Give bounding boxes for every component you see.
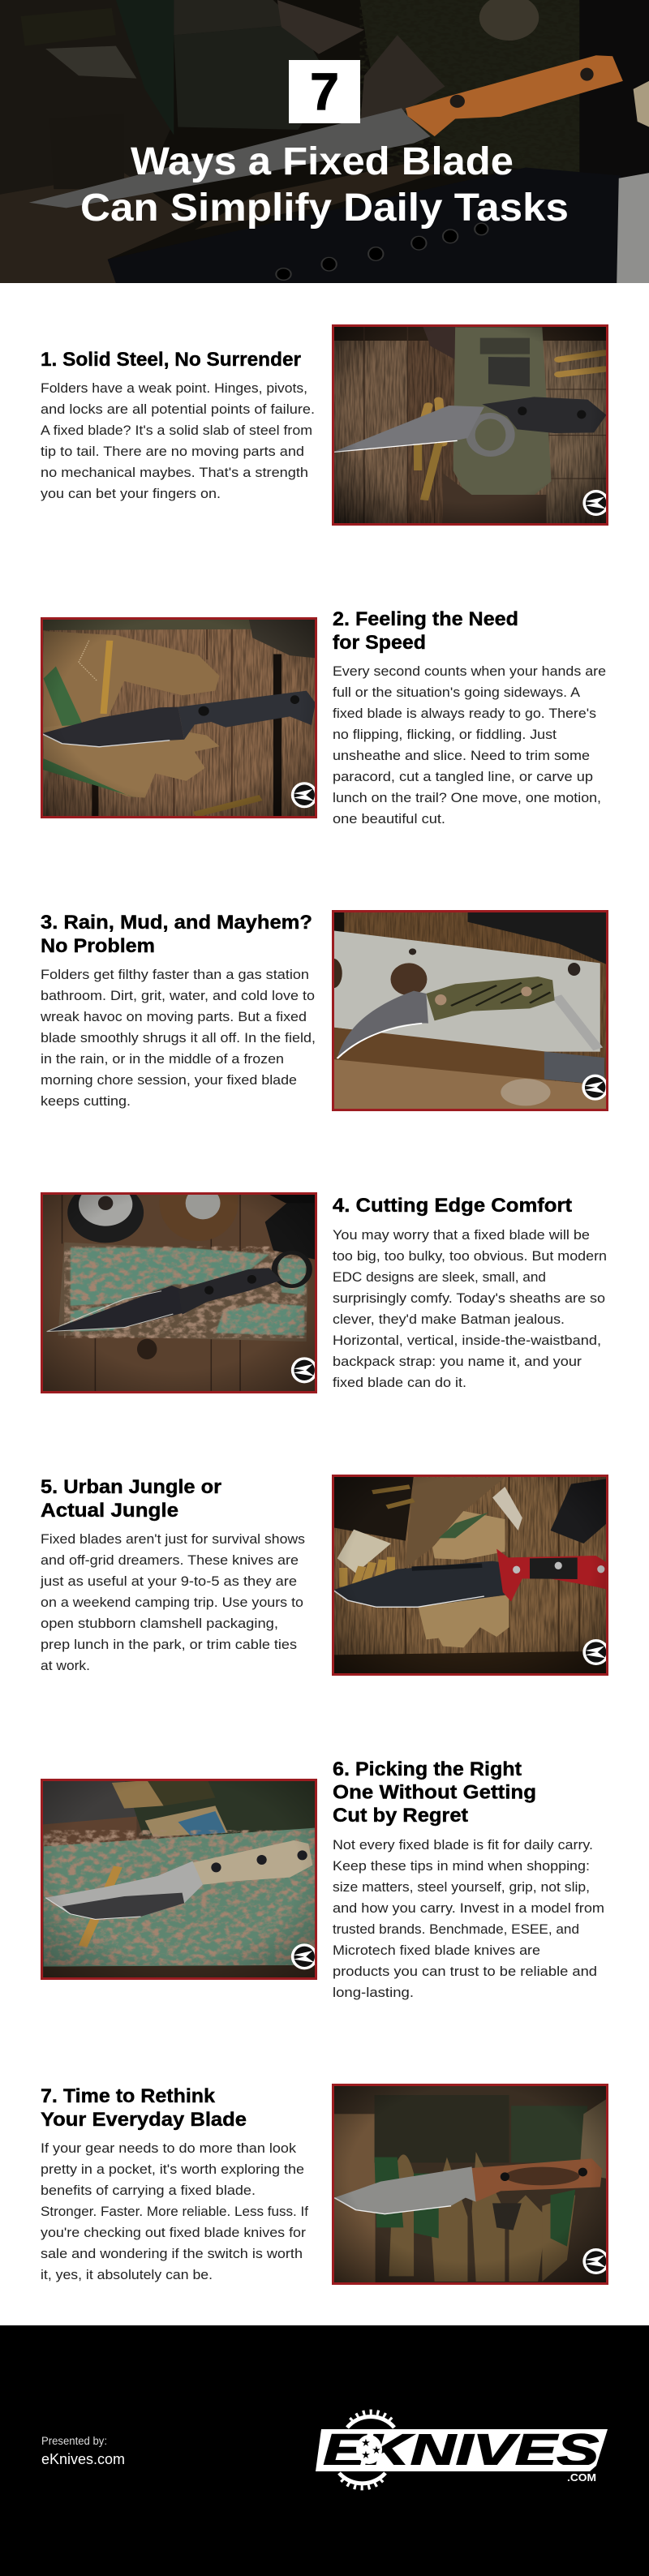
- section 5: urban jungle: [40, 1475, 609, 1676]
- heading 4: 4. Cutting Edge Comfort: [333, 1195, 572, 1217]
- body text 3: in the rain, or in the middle of a frozen: [41, 1052, 284, 1067]
- photo 4: knife on rusty box: [41, 1166, 318, 1393]
- heading 3: 3. Rain, Mud, and Mayhem?: [41, 912, 312, 934]
- body text 5: and off-grid dreamers. These knives are: [41, 1553, 299, 1568]
- body text 1: you can bet your fingers on.: [41, 487, 221, 501]
- body text 5: prep lunch in the park, or trim cable ties: [41, 1638, 297, 1652]
- heading 3: No Problem: [41, 935, 155, 957]
- body text 1: no mechanical maybes. That's a strength: [41, 466, 308, 480]
- logo stars: [356, 2435, 382, 2464]
- eKnives logo: EKNIVES: [323, 2424, 599, 2475]
- heading 6: [333, 1758, 536, 1827]
- body text 6: [333, 1838, 604, 2000]
- heading 6: One Without Getting: [333, 1781, 536, 1804]
- heading 2: for Speed: [333, 632, 426, 654]
- body text 4: clever, they'd make Batman jealous.: [333, 1312, 565, 1327]
- header banner: [0, 0, 649, 283]
- title: Ways a Fixed Blade: [131, 140, 514, 183]
- body text 7: sale and wondering if the switch is worth: [41, 2247, 303, 2261]
- body text 3: blade smoothly shrugs it all off. In the field,: [41, 1031, 316, 1045]
- body text 6: size matters, steel yourself, grip, not slip,: [333, 1880, 590, 1895]
- body text 4: too big, too bulky, too obvious. But modern: [333, 1249, 607, 1264]
- heading 7: Your Everyday Blade: [41, 2109, 247, 2131]
- photo 3: karambit on steel plate: [324, 910, 608, 1111]
- section 3: rain, mud, mayhem: [40, 910, 608, 1111]
- body text 3: morning chore session, your fixed blade: [41, 1073, 297, 1088]
- body text 7: Stronger. Faster. More reliable. Less fuss. If: [41, 2205, 308, 2219]
- section 1: solid steel: [41, 324, 609, 526]
- body text 4: fixed blade can do it.: [333, 1376, 466, 1390]
- section 4: cutting edge comfort: [41, 1166, 607, 1393]
- logo stars: ★: [361, 2436, 371, 2449]
- presenter credit: [41, 2435, 125, 2467]
- body text 6: products you can trust to be reliable and: [333, 1964, 597, 1979]
- body text 6: and how you carry. Invest in a model from: [333, 1901, 604, 1916]
- body text 5: open stubborn clamshell packaging,: [41, 1616, 278, 1631]
- heading 1: 1. Solid Steel, No Surrender: [41, 349, 301, 371]
- watermark badge 7: [582, 2248, 609, 2274]
- body text 6: Not every fixed blade is fit for daily carry.: [333, 1838, 593, 1853]
- body text 4: EDC designs are sleek, small, and: [333, 1270, 546, 1285]
- logo stars: ★: [361, 2449, 371, 2461]
- presenter credit: eKnives.com: [41, 2451, 125, 2467]
- photo 7: wood handled knife: [332, 2084, 609, 2285]
- body text 7: you're checking out fixed blade knives for: [41, 2226, 307, 2240]
- watermark badge 6: [291, 1943, 318, 1969]
- heading 7: [41, 2085, 247, 2131]
- body text 3: Folders get filthy faster than a gas station: [41, 968, 309, 982]
- body text 6: Keep these tips in mind when shopping:: [333, 1859, 590, 1874]
- body text 1: and locks are all potential points of failure.: [41, 402, 315, 417]
- number badge: [289, 60, 360, 123]
- body text 2: no flipping, flicking, or fiddling. Just: [333, 728, 557, 742]
- number badge: 7: [310, 62, 339, 121]
- body text 2: paracord, cut a tangled line, or carve up: [333, 770, 593, 784]
- body text 1: tip to tail. There are no moving parts and: [41, 444, 304, 459]
- body text 2: one beautiful cut.: [333, 812, 445, 826]
- heading 6: Cut by Regret: [333, 1805, 468, 1827]
- heading 7: 7. Time to Rethink: [41, 2085, 216, 2107]
- title: Can Simplify Daily Tasks: [80, 187, 569, 230]
- body text 6: Microtech fixed blade knives are: [333, 1943, 540, 1958]
- heading 3: [41, 912, 312, 957]
- heading 5: [41, 1476, 221, 1522]
- logo .com: .COM: [567, 2472, 596, 2484]
- photo 1: knife on magazine: [332, 324, 609, 526]
- logo gear arcs: [339, 2413, 394, 2487]
- body text 3: bathroom. Dirt, grit, water, and cold love to: [41, 989, 315, 1003]
- heading 5: 5. Urban Jungle or: [41, 1476, 221, 1498]
- body text 4: [333, 1228, 607, 1390]
- heading 6: 6. Picking the Right: [333, 1758, 522, 1780]
- body text 7: [41, 2141, 308, 2282]
- section 2: need for speed: [41, 608, 606, 826]
- body text 2: [333, 664, 606, 826]
- body text 3: wreak havoc on moving parts. But a fixed: [40, 1010, 307, 1024]
- title: [80, 140, 569, 230]
- heading 2: [333, 608, 518, 654]
- heading 2: 2. Feeling the Need: [333, 608, 518, 630]
- body text 3: keeps cutting.: [41, 1094, 131, 1109]
- body text 2: unsheathe and slice. Need to trim some: [333, 749, 590, 763]
- body text 4: Horizontal, vertical, inside-the-waistband,: [333, 1333, 601, 1348]
- body text 5: at work.: [41, 1659, 90, 1673]
- body text 7: If your gear needs to do more than look: [41, 2141, 297, 2156]
- presenter credit: Presented by:: [41, 2435, 107, 2447]
- body text 1: Folders have a weak point. Hinges, pivots,: [41, 381, 307, 396]
- footer: [0, 2325, 649, 2576]
- body text 6: trusted brands. Benchmade, ESEE, and: [333, 1922, 579, 1937]
- watermark badge 4: [291, 1357, 318, 1383]
- photo 6: tan handled knife: [41, 1779, 319, 1980]
- body text 2: Every second counts when your hands are: [333, 664, 606, 679]
- body text 3: [40, 968, 316, 1109]
- watermark badge 2: [291, 782, 318, 808]
- section 6: picking the right one: [41, 1758, 604, 2000]
- body text 7: pretty in a pocket, it's worth exploring the: [41, 2162, 304, 2177]
- body text 4: You may worry that a fixed blade will be: [333, 1228, 590, 1243]
- body text 7: it, yes, it absolutely can be.: [41, 2268, 213, 2282]
- watermark badge 3: [582, 1075, 608, 1101]
- body text 1: [41, 381, 315, 501]
- header background photo: [0, 0, 649, 283]
- body text 2: fixed blade is always ready to go. There's: [333, 706, 596, 721]
- body text 2: lunch on the trail? One move, one motion,: [333, 791, 601, 805]
- logo stars: ★: [372, 2444, 381, 2456]
- body text 5: Fixed blades aren't just for survival shows: [41, 1532, 305, 1547]
- body text 6: long-lasting.: [333, 1986, 414, 2000]
- body text 1: A fixed blade? It's a solid slab of steel from: [41, 423, 312, 438]
- photo 2: knife on glove: [41, 617, 318, 818]
- body text 4: surprisingly comfy. Today's sheaths are so: [333, 1291, 605, 1306]
- heading 5: Actual Jungle: [41, 1500, 178, 1522]
- section 7: rethink your blade: [41, 2084, 609, 2285]
- body text 2: full or the situation's going sideways. A: [333, 685, 580, 700]
- watermark badge 5: [582, 1639, 609, 1665]
- body text 4: backpack strap: you name it, and your: [333, 1355, 582, 1369]
- body text 5: [40, 1532, 305, 1673]
- watermark badge 1: [582, 490, 609, 516]
- body text 7: benefits of carrying a fixed blade.: [41, 2183, 256, 2198]
- body text 5: on a weekend camping trip. Use yours to: [41, 1595, 303, 1610]
- photo 5: red handled knife: [332, 1475, 609, 1676]
- eKnives logo: [316, 2413, 608, 2487]
- body text 5: just as useful at your 9-to-5 as they are: [40, 1574, 297, 1589]
